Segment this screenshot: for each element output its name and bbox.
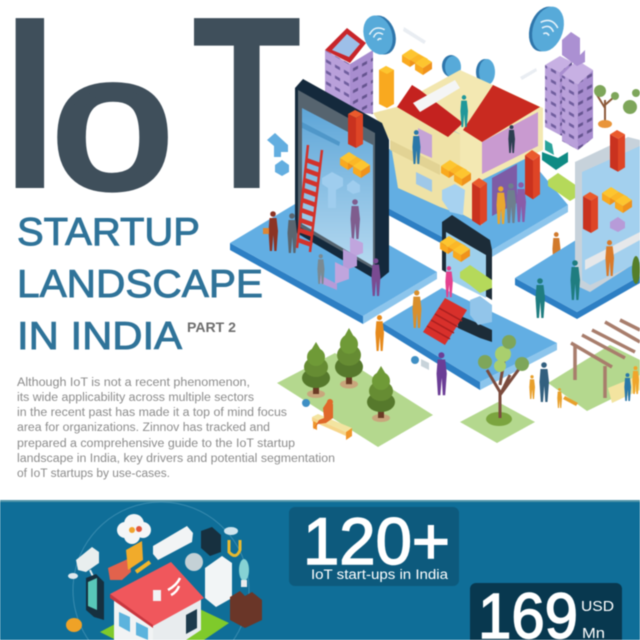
icon: key [136,562,150,572]
panel: blue statistics band [0,500,640,640]
icon: binoculars [230,591,262,628]
platform: phone [383,288,557,390]
icon: chat bubbles [108,541,143,580]
icon: red ladder [297,145,322,252]
lawn with leafy tree [460,335,535,443]
icon: purple stairs [320,237,363,290]
heading: startup landscape in India [17,211,263,358]
heading: startup landscape in India: IN INDIA [17,315,182,358]
icon: watch [185,553,203,571]
house [373,70,543,226]
illustration: isometric IoT city [230,2,640,447]
intro paragraph: its wide applicability across multiple sectors [17,392,254,404]
title: IoT: o [52,17,173,227]
heading: startup landscape in India: LANDSCAPE [17,263,263,306]
icon: purple tower right [545,32,593,150]
icon: phone [86,574,104,620]
intro paragraph: area for organizations. Zinnov has tracked and [17,422,270,434]
icon: cloud [117,514,151,544]
icon: small wifi discs [442,55,495,85]
intro paragraph: landscape in India, key drivers and potential segmentation [17,453,335,465]
icon: floating orange blocks [379,27,537,108]
heading: startup landscape in India: STARTUP [17,211,200,254]
icon: purple tower left [325,28,373,114]
lawn with pergola [529,256,640,411]
stat card: 120+ startups: 120+ [303,504,450,578]
people: phone platform [375,290,447,395]
stat card: 169 USD Mn: USD [581,599,614,615]
stat card: 120+ startups: IoT start-ups in India [311,567,449,582]
lawn with pine trees [277,328,433,447]
intro paragraph [17,377,335,480]
platform: right tablet [515,225,640,319]
intro paragraph: Although IoT is not a recent phenomenon, [17,377,250,389]
icon: fridge [205,556,232,607]
people: left platform [263,211,560,296]
icon: wifi disc large right [523,2,569,56]
icon: green tetris block [548,173,580,201]
intro paragraph: of IoT startups by use-cases. [17,468,170,480]
tablet right [536,130,640,318]
platform: left tablet [230,198,437,324]
icon: teal car [542,140,568,170]
intro paragraph: prepared a comprehensive guide to the IoT startup [17,438,295,450]
title: IoT [2,0,301,241]
icon: bulb [239,559,249,587]
icon: yellow device [66,618,82,632]
icon: red stairs [423,298,467,345]
icon: wifi disc large left [359,11,401,59]
label: part 2: PART 2 [187,319,236,335]
phone [440,215,492,342]
platform: house base [388,100,568,264]
icon: camera [68,547,99,585]
icon: air conditioner [153,526,193,560]
icon: coffee machine [201,527,221,556]
trees far right [594,85,640,128]
icon: drone and magnet [224,527,240,556]
illustration: smart home devices [66,502,262,640]
intro paragraph: in the recent past has made it a top of mind focus [17,407,287,419]
bench with seated person [312,399,352,440]
tablet left [267,79,389,281]
icon: house [100,562,229,640]
